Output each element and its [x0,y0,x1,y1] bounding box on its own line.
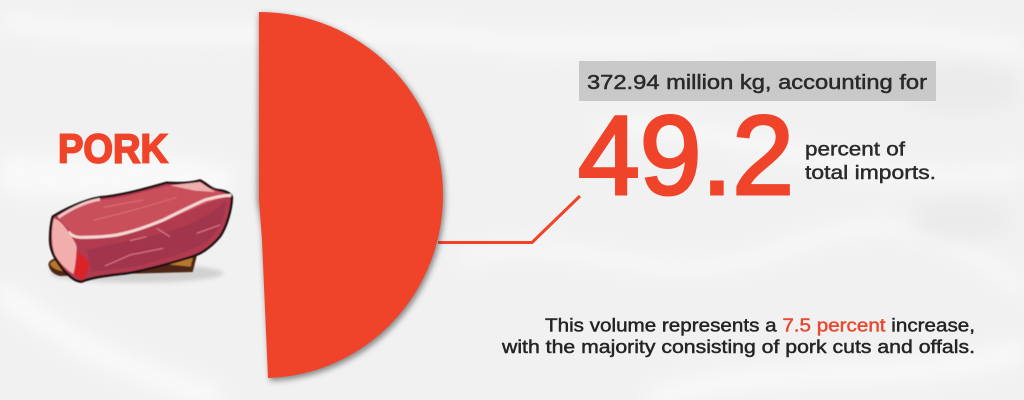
callout box: amount [579,61,936,101]
icon: pork cut on a board [48,180,232,283]
heading: PORK: PORK [58,126,168,172]
description text [501,316,975,357]
half-circle pie chart [257,12,445,381]
label: percent of total imports: percent of [805,138,906,160]
callout box: amount: 372.94 million kg, accounting for [587,72,927,94]
connector line [438,196,580,242]
label: percent of total imports [805,138,936,184]
description text: This volume represents a 7.5 percent increase, [545,316,975,336]
label: percent of total imports: total imports. [805,162,936,184]
description text: with the majority consisting of pork cuts and offals. [501,337,975,357]
big number: 49.2: 49.2 [578,93,794,218]
